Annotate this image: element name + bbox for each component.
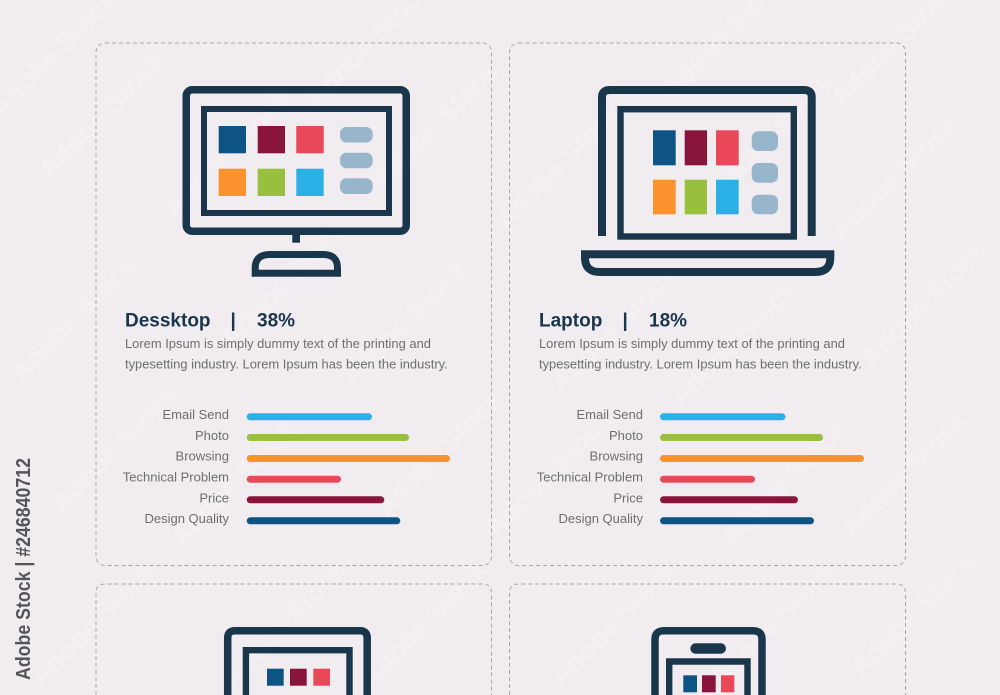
heading: desktop: |	[230, 310, 236, 332]
text block: laptop description	[539, 336, 862, 372]
infographic canvas: Adobe Stock	[165, 414, 303, 553]
text block: desktop description: Lorem Ipsum is simply dummy text of the printing and	[125, 336, 431, 351]
infographic canvas: Adobe Stock	[835, 404, 973, 543]
heading: laptop	[539, 310, 687, 332]
bar chart: desktop: Technical Problem	[123, 470, 229, 485]
bar chart: laptop	[537, 407, 864, 526]
panel: tablet	[96, 584, 492, 695]
icon: tablet	[228, 631, 367, 695]
infographic canvas: Adobe Stock	[703, 67, 841, 206]
bar chart: desktop: Email Send	[163, 407, 229, 422]
bar chart: laptop: Technical Problem	[537, 470, 643, 485]
text block: laptop description: typesetting industry. Lorem Ipsum has been the industry.	[539, 357, 862, 372]
heading: laptop: |	[622, 310, 628, 332]
infographic canvas: Adobe Stock	[705, 554, 843, 693]
infographic canvas: Adobe Stock	[665, 274, 803, 413]
infographic canvas: Adobe Stock	[45, 379, 183, 518]
bar chart: laptop: Browsing	[590, 449, 643, 464]
heading: laptop: 18%	[649, 310, 687, 332]
bar chart: desktop: Browsing	[176, 449, 229, 464]
infographic canvas: Adobe Stock	[855, 234, 993, 373]
text block: desktop description: typesetting industry. Lorem Ipsum has been the industry.	[125, 357, 448, 372]
infographic canvas: Adobe Stock	[33, 46, 171, 185]
bar chart: laptop: Email Send	[577, 407, 643, 422]
infographic canvas: Adobe Stock	[25, 554, 163, 693]
bar chart: desktop: Design Quality	[144, 511, 229, 526]
heading: desktop: 38%	[257, 310, 295, 332]
stock id caption: Adobe Stock | #246840712	[13, 458, 35, 680]
infographic canvas: Adobe Stock	[5, 249, 143, 388]
infographic canvas: Adobe Stock	[158, 84, 296, 223]
heading: desktop	[125, 310, 295, 332]
infographic canvas: Adobe Stock	[490, 96, 628, 235]
icon: desktop monitor	[186, 90, 406, 273]
infographic canvas: Adobe Stock	[715, 414, 853, 553]
infographic canvas: Adobe Stock	[826, 107, 964, 246]
bar chart: laptop: Photo	[609, 428, 643, 443]
text block: desktop description	[125, 336, 448, 372]
icon: laptop	[585, 90, 830, 272]
infographic canvas: Adobe Stock	[366, 56, 504, 195]
panel: desktop	[96, 43, 492, 566]
infographic canvas: Adobe Stock	[335, 254, 473, 393]
infographic canvas: Adobe Stock	[480, 404, 618, 543]
infographic canvas: Adobe Stock	[545, 554, 683, 693]
bar chart: desktop	[123, 407, 450, 526]
bar chart: desktop: Photo	[195, 428, 229, 443]
heading: laptop: Laptop	[539, 310, 602, 332]
bar chart: laptop: Price	[613, 491, 643, 506]
panel: smartphone	[510, 584, 906, 695]
icon: smartphone	[655, 631, 762, 695]
infographic canvas: Adobe Stock	[355, 554, 493, 693]
panel: laptop	[510, 43, 906, 566]
text block: laptop description: Lorem Ipsum is simply dummy text of the printing and	[539, 336, 845, 351]
infographic canvas: Adobe Stock	[370, 384, 508, 523]
heading: desktop: Dessktop	[125, 310, 211, 332]
infographic canvas: Adobe Stock	[845, 544, 983, 683]
infographic canvas: Adobe Stock	[215, 214, 353, 353]
infographic canvas: Adobe Stock	[545, 259, 683, 398]
bar chart: desktop: Price	[199, 491, 229, 506]
bar chart: laptop: Design Quality	[558, 511, 643, 526]
infographic canvas: Adobe Stock	[215, 554, 353, 693]
